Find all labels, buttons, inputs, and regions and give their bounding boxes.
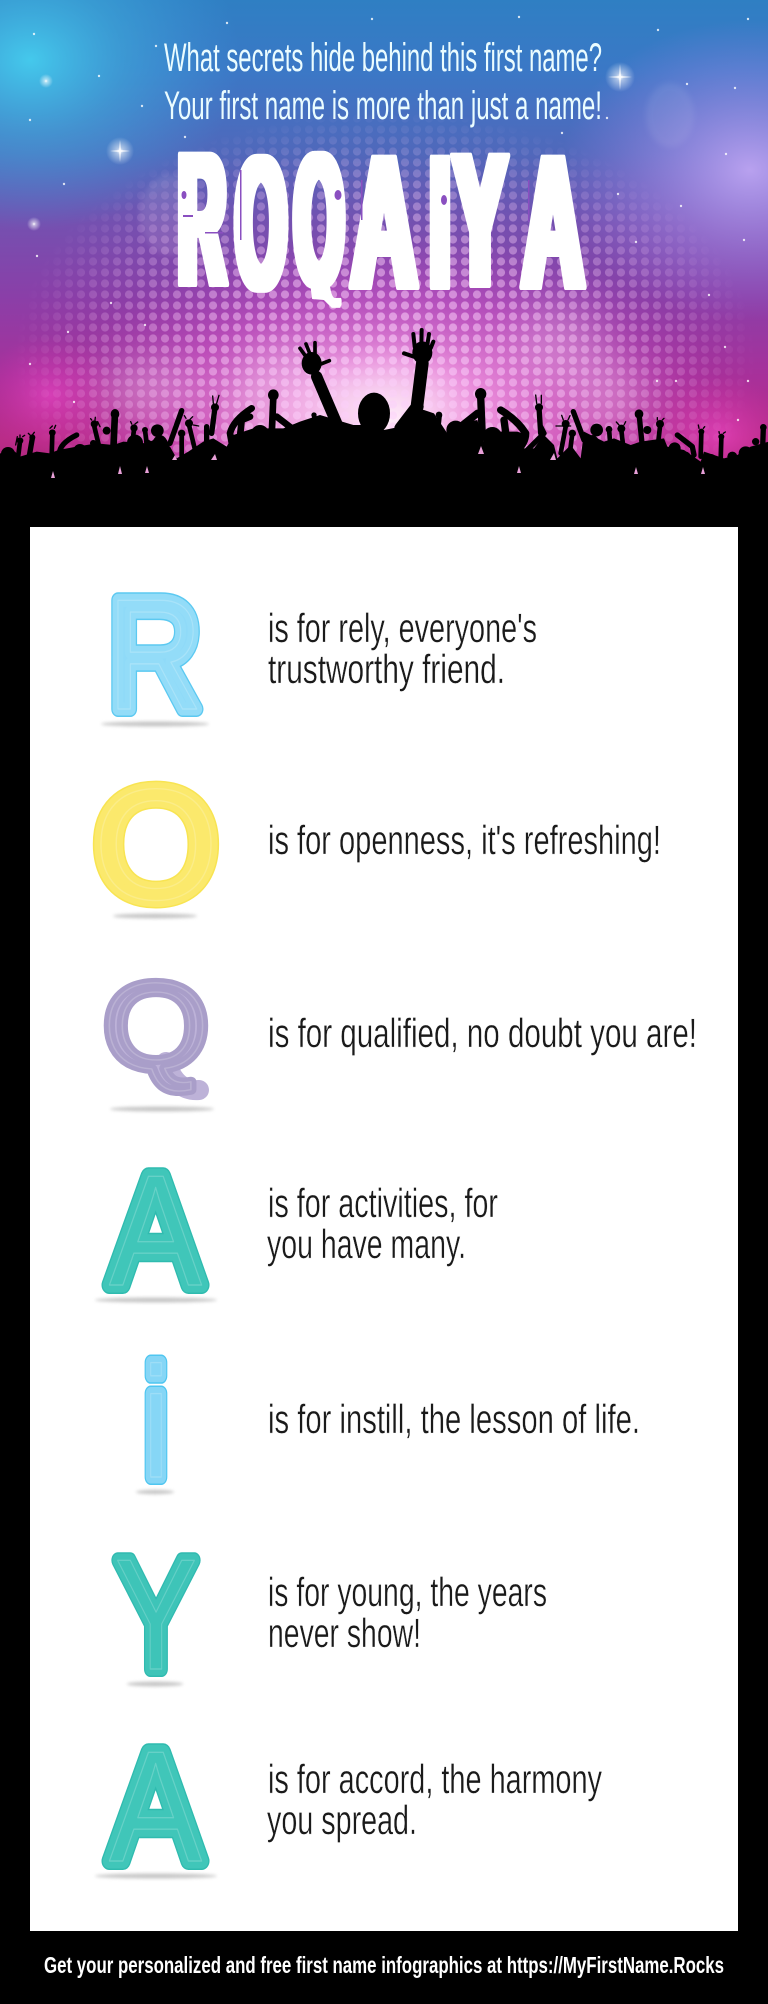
- row: letter i: [136, 1334, 640, 1511]
- white content panel: [30, 527, 738, 1931]
- crowd silhouette: [0, 330, 768, 530]
- name title: Y: [454, 114, 506, 325]
- text: second A line: is for accord, the harmony: [268, 1756, 602, 1802]
- icon: bubble letter A: A: [109, 1718, 202, 1895]
- name title: O: [236, 118, 286, 328]
- icon: bubble letter i: i: [143, 1334, 169, 1511]
- sparkles and star dots: [27, 16, 749, 421]
- text: R line: trustworthy friend.: [268, 646, 505, 692]
- icon: bubble letter i: i: [143, 1334, 169, 1511]
- text: Y line: [268, 1569, 547, 1656]
- row: letter R: [101, 566, 537, 743]
- text: second A line: you spread.: [267, 1797, 417, 1843]
- icon: bubble letter Y: Y: [115, 1527, 197, 1704]
- icon: bubble letter O: O: [93, 756, 219, 933]
- name title: [178, 150, 587, 308]
- text: A line: is for activities, for: [268, 1180, 498, 1226]
- icon: bubble letter Q: Q: [103, 959, 209, 1094]
- icon: bubble letter A: A: [109, 1718, 202, 1895]
- text: Y line: is for young, the years: [268, 1569, 547, 1615]
- icon: bubble letter i: i: [143, 1334, 169, 1511]
- row: letter A: [95, 1142, 498, 1319]
- text: second A line: [267, 1756, 602, 1843]
- name title: R: [179, 114, 225, 324]
- icon: bubble letter A: A: [109, 1142, 202, 1319]
- text: Y line: never show!: [268, 1610, 421, 1656]
- name title: I: [430, 118, 450, 328]
- icon: bubble letter R: R: [107, 566, 203, 743]
- text: R line: [268, 605, 537, 692]
- name title: Q: [295, 115, 343, 325]
- crowd: gaps of light between people: [51, 446, 705, 478]
- row: letter Y: [115, 1527, 547, 1704]
- name title: A: [522, 117, 584, 327]
- icon: bubble letter O: O: [93, 756, 219, 933]
- crowd: left half: [0, 343, 390, 500]
- row: letter O: [93, 756, 661, 933]
- icon: bubble letter R: R: [107, 566, 203, 743]
- text: A line: [267, 1180, 498, 1267]
- icon: bubble letter A: A: [109, 1142, 202, 1319]
- icon: bubble letter A: A: [109, 1142, 202, 1319]
- row: letter Q: [103, 959, 697, 1112]
- icon: bubble letter Y: Y: [115, 1527, 197, 1704]
- header concert background: [0, 0, 768, 462]
- icon: bubble letter Q: Q: [103, 959, 209, 1094]
- icon: bubble letter A: A: [109, 1718, 202, 1895]
- icon: bubble letter R: R: [107, 566, 203, 743]
- crowd: right half: [384, 330, 768, 500]
- name title: A: [351, 119, 417, 328]
- icon: bubble letter O: O: [93, 756, 219, 933]
- header question text: [164, 36, 602, 128]
- row: second letter A: [95, 1718, 602, 1895]
- text: A line: you have many.: [267, 1221, 466, 1267]
- text: R line: is for rely, everyone's: [268, 605, 537, 651]
- icon: bubble letter Y: Y: [115, 1527, 197, 1704]
